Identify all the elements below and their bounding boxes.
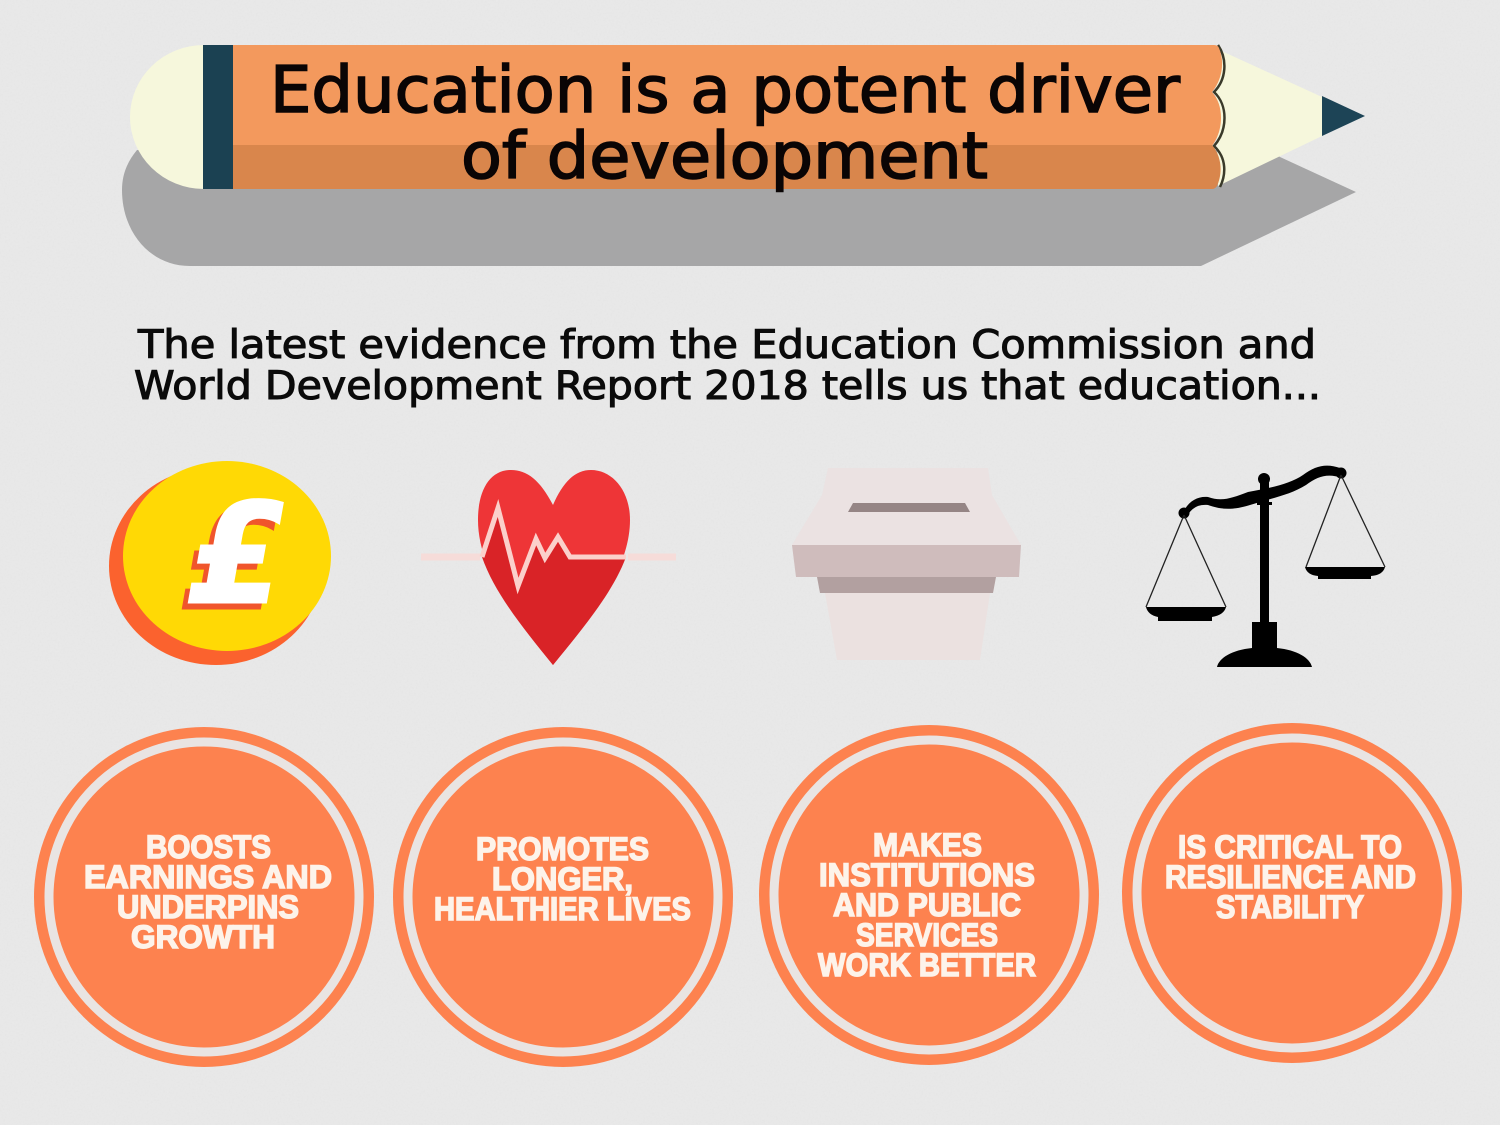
- panel: promotes health: PROMOTES: [476, 831, 649, 867]
- panel: boosts earnings: UNDERPINS: [117, 889, 299, 925]
- title: Education is a potent driver: [270, 54, 1181, 128]
- icon: heart with pulse: [421, 470, 676, 665]
- pencil wood tip: [1215, 48, 1322, 186]
- panel: institutions: INSTITUTIONS: [819, 857, 1035, 893]
- panel: resilience: IS CRITICAL TO: [1178, 829, 1402, 865]
- icon: pound coin: £: [175, 474, 300, 635]
- icon: pound coin: [109, 461, 331, 665]
- panel: boosts earnings: GROWTH: [131, 919, 275, 955]
- pencil shadow: [122, 150, 1356, 266]
- intro text: [134, 323, 1321, 409]
- icon: scales of justice: [1146, 466, 1385, 667]
- pencil body: [233, 45, 1222, 146]
- panel: institutions: [759, 725, 1099, 1065]
- panel: institutions: MAKES: [873, 827, 982, 863]
- pencil banner: [122, 45, 1365, 266]
- title: [270, 54, 1181, 194]
- panel: promotes health: HEALTHIER LIVES: [434, 891, 691, 927]
- panel: resilience: RESILIENCE AND: [1165, 859, 1416, 895]
- panel: institutions: WORK BETTER: [818, 947, 1036, 983]
- panel: institutions: SERVICES: [856, 917, 998, 953]
- title: of development: [461, 120, 988, 194]
- icon: ballot box: [792, 468, 1021, 660]
- panel: institutions: AND PUBLIC: [833, 887, 1021, 923]
- icon: pound coin: £: [169, 480, 294, 641]
- pencil lead: [1322, 96, 1365, 136]
- panel: resilience: [1122, 723, 1462, 1063]
- pencil band: [203, 45, 234, 189]
- pencil end cap: [130, 45, 204, 189]
- panel: resilience: STABILITY: [1216, 889, 1364, 925]
- panel: boosts earnings: BOOSTS: [146, 829, 271, 865]
- panel: promotes health: [393, 727, 733, 1067]
- pencil scallop edge: [1214, 45, 1224, 187]
- intro text: World Development Report 2018 tells us that education...: [134, 364, 1321, 409]
- panel: promotes health: LONGER,: [492, 861, 633, 897]
- intro text: The latest evidence from the Education Commission and: [137, 323, 1316, 368]
- panel: boosts earnings: EARNINGS AND: [84, 859, 332, 895]
- pencil lower facet: [233, 145, 1221, 189]
- panel: boosts earnings: [34, 727, 374, 1067]
